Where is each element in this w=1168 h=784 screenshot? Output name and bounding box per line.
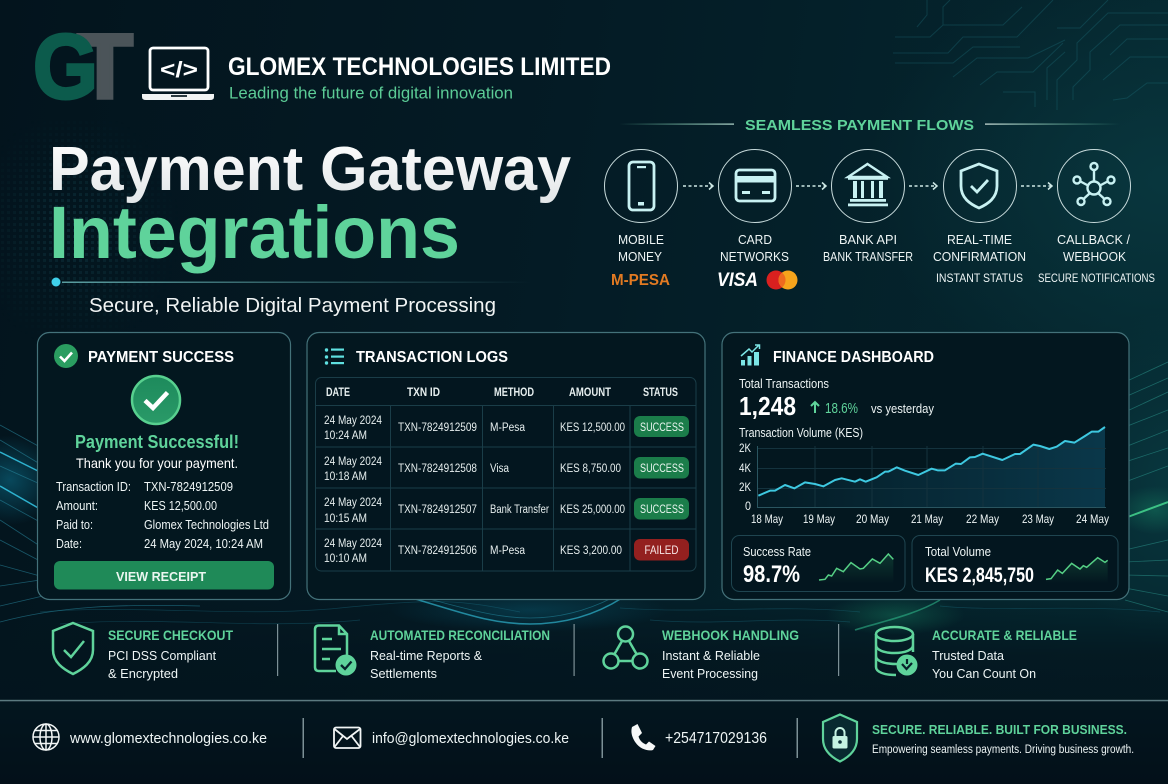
table header: TXN ID xyxy=(407,387,440,399)
receipt details: Date: xyxy=(56,537,82,551)
subtitle: Secure, Reliable Digital Payment Processing xyxy=(89,294,496,317)
card: total volume: KES 2,845,750 xyxy=(925,564,1034,587)
feature: secure checkout: PCI DSS Compliant xyxy=(108,648,216,663)
company name: Leading the future of digital innovation xyxy=(229,84,513,102)
arrow xyxy=(1021,182,1052,190)
receipt details: Transaction ID: xyxy=(56,480,131,494)
line chart: transaction volume xyxy=(739,426,1109,526)
row 3: SUCCESS xyxy=(640,504,684,516)
icon: chart xyxy=(741,345,760,366)
row 1: TXN-7824912509 xyxy=(398,422,477,434)
kpi: total transactions xyxy=(739,377,935,421)
table header: METHOD xyxy=(494,387,534,399)
receipt details: Amount: xyxy=(56,499,98,513)
line chart: transaction volume: 2K xyxy=(739,480,751,494)
feature: automated reconciliation xyxy=(315,626,550,681)
arrow xyxy=(796,182,826,190)
feature: webhook handling: Event Processing xyxy=(662,666,758,681)
row 2: SUCCESS xyxy=(640,463,684,475)
line chart: transaction volume: 23 May xyxy=(1022,512,1054,526)
row 1: 10:24 AM xyxy=(324,430,367,442)
icon: laptop with code: </> xyxy=(160,57,198,82)
step: real-time confirmation: REAL-TIME xyxy=(947,232,1012,247)
step: real-time confirmation: INSTANT STATUS xyxy=(936,271,1023,285)
feature: automated reconciliation: Settlements xyxy=(370,666,437,681)
kpi: total transactions: 18.6% xyxy=(825,401,858,417)
line chart: transaction volume: 2K xyxy=(739,441,751,455)
icon: nodes xyxy=(604,626,648,668)
footer: website: www.glomextechnologies.co.ke xyxy=(69,730,267,747)
logo: GT monogram: G xyxy=(33,16,98,118)
icon: large check xyxy=(132,376,180,424)
icon: list xyxy=(325,348,344,365)
step: bank api: BANK TRANSFER xyxy=(823,249,913,264)
footer band xyxy=(0,700,1168,784)
feature: accurate and reliable: Trusted Data xyxy=(932,648,1005,663)
row 1 xyxy=(324,415,689,442)
row 2: Visa xyxy=(490,463,510,475)
panel heading: FINANCE DASHBOARD xyxy=(773,349,934,366)
row 3 xyxy=(324,497,689,525)
card: total volume xyxy=(912,536,1118,592)
success message: Thank you for your payment. xyxy=(76,455,238,471)
line chart: transaction volume: 21 May xyxy=(911,512,943,526)
row 4: FAILED xyxy=(644,545,678,557)
panel heading: TRANSACTION LOGS xyxy=(356,349,508,366)
receipt details: KES 12,500.00 xyxy=(144,499,217,513)
panel: seamless payment flows xyxy=(604,117,1155,291)
feature: automated reconciliation: Real-time Reports & xyxy=(370,648,482,663)
row 2: TXN-7824912508 xyxy=(398,463,477,475)
step: card networks: NETWORKS xyxy=(720,249,789,264)
step: card networks xyxy=(717,150,798,291)
feature: webhook handling xyxy=(604,626,799,681)
line chart: transaction volume: Transaction Volume (KES) xyxy=(739,426,863,440)
success message: Payment Successful! xyxy=(75,432,239,452)
step: callback webhook: CALLBACK / xyxy=(1057,232,1130,247)
footer: tagline: SECURE. RELIABLE. BUILT FOR BUSINESS. xyxy=(872,722,1127,737)
footer: email: info@glomextechnologies.co.ke xyxy=(372,730,569,747)
feature: accurate and reliable: ACCURATE & RELIABLE xyxy=(932,627,1077,643)
icon: shield lock xyxy=(823,714,857,762)
row 4 xyxy=(324,538,689,565)
row 4: 10:10 AM xyxy=(324,553,367,565)
footer: tagline xyxy=(823,714,1134,762)
step: card networks: CARD xyxy=(738,232,772,247)
receipt details xyxy=(56,480,269,551)
company name xyxy=(228,53,611,102)
panel: payment success xyxy=(38,332,290,600)
panel: transaction logs xyxy=(307,332,705,600)
footer: tagline: Empowering seamless payments. Driving business growth. xyxy=(872,744,1134,756)
footer: email xyxy=(334,728,569,748)
row 1: 24 May 2024 xyxy=(324,415,383,427)
kpi: total transactions: 1,248 xyxy=(739,391,796,421)
table header: AMOUNT xyxy=(569,387,611,399)
arrow xyxy=(683,182,713,190)
icon: laptop with code xyxy=(142,48,214,100)
receipt details: 24 May 2024, 10:24 AM xyxy=(144,537,263,551)
feature: webhook handling: WEBHOOK HANDLING xyxy=(662,627,799,643)
feature: webhook handling: Instant & Reliable xyxy=(662,648,760,663)
line chart: transaction volume: 18 May xyxy=(751,512,783,526)
success message xyxy=(75,432,239,471)
company name: GLOMEX TECHNOLOGIES LIMITED xyxy=(228,53,611,81)
footer: phone xyxy=(631,724,767,750)
row 3: Bank Transfer xyxy=(490,504,549,516)
step: callback webhook xyxy=(1038,150,1155,285)
step: card networks: VISA xyxy=(717,270,758,291)
table header: STATUS xyxy=(643,387,678,399)
line chart: transaction volume: 19 May xyxy=(803,512,835,526)
logo: GT monogram: T xyxy=(77,16,133,118)
step: mobile money xyxy=(604,150,678,289)
arrow xyxy=(909,182,937,190)
row 2: 10:18 AM xyxy=(324,471,367,483)
panel: finance dashboard xyxy=(722,332,1129,600)
step: real-time confirmation xyxy=(933,150,1026,285)
card: success rate: 98.7% xyxy=(743,561,800,588)
icon: shield check xyxy=(53,623,93,674)
step: real-time confirmation: CONFIRMATION xyxy=(933,249,1026,264)
row 1: SUCCESS xyxy=(640,422,684,434)
line chart: transaction volume: 20 May xyxy=(856,512,889,526)
feature: secure checkout: & Encrypted xyxy=(108,666,178,681)
row 2: 24 May 2024 xyxy=(324,456,383,468)
row 1: KES 12,500.00 xyxy=(560,422,625,434)
row 3: 10:15 AM xyxy=(324,513,367,525)
kpi: total transactions: vs yesterday xyxy=(871,402,935,416)
icon: success badge xyxy=(54,344,78,368)
receipt details: Glomex Technologies Ltd xyxy=(144,518,269,532)
feature: accurate and reliable xyxy=(876,627,1077,681)
step: mobile money: MONEY xyxy=(618,249,662,264)
main title: Payment Gateway xyxy=(49,135,572,204)
panel heading: PAYMENT SUCCESS xyxy=(88,349,234,366)
row 3: 24 May 2024 xyxy=(324,497,383,509)
feature: automated reconciliation: AUTOMATED RECONCILIATION xyxy=(370,627,550,643)
row 3: KES 25,000.00 xyxy=(560,504,625,516)
title rule with dot xyxy=(52,278,532,286)
line chart: transaction volume: 24 May xyxy=(1076,512,1109,526)
row 4: KES 3,200.00 xyxy=(560,545,622,557)
feature: secure checkout xyxy=(53,623,233,681)
row 4: 24 May 2024 xyxy=(324,538,383,550)
flows heading: SEAMLESS PAYMENT FLOWS xyxy=(745,117,974,134)
card: success rate: Success Rate xyxy=(743,545,811,559)
feature: secure checkout: SECURE CHECKOUT xyxy=(108,627,233,643)
icon: document check xyxy=(315,626,356,676)
card: total volume: Total Volume xyxy=(925,545,991,559)
step: mobile money: M-PESA xyxy=(611,272,670,289)
receipt details: Paid to: xyxy=(56,518,93,532)
footer: phone: +254717029136 xyxy=(665,730,767,747)
table xyxy=(316,378,696,571)
table header xyxy=(326,387,678,399)
icon: database check xyxy=(876,627,918,676)
row 2 xyxy=(324,456,689,483)
line chart: transaction volume: 0 xyxy=(745,499,751,513)
icon: globe xyxy=(33,724,59,750)
main title: Integrations xyxy=(49,191,460,274)
icon: handset xyxy=(631,724,656,750)
step: mobile money: MOBILE xyxy=(618,232,664,247)
step: bank api xyxy=(823,150,913,264)
row 4: M-Pesa xyxy=(490,545,526,557)
button: view receipt xyxy=(54,561,274,590)
step: callback webhook: WEBHOOK xyxy=(1063,249,1126,264)
row 3: TXN-7824912507 xyxy=(398,504,477,516)
card: success rate xyxy=(732,536,905,592)
footer: website xyxy=(33,724,267,750)
row 1: M-Pesa xyxy=(490,422,526,434)
button: view receipt: VIEW RECEIPT xyxy=(116,569,206,584)
line chart: transaction volume: 22 May xyxy=(966,512,999,526)
icon: envelope xyxy=(334,728,360,748)
row 4: TXN-7824912506 xyxy=(398,545,477,557)
step: bank api: BANK API xyxy=(839,232,897,247)
line chart: transaction volume: 4K xyxy=(739,461,751,475)
feature: accurate and reliable: You Can Count On xyxy=(932,666,1036,681)
row 2: KES 8,750.00 xyxy=(560,463,621,475)
kpi: total transactions: Total Transactions xyxy=(739,377,829,391)
main title xyxy=(49,135,572,274)
table header: DATE xyxy=(326,387,350,399)
receipt details: TXN-7824912509 xyxy=(144,480,233,494)
